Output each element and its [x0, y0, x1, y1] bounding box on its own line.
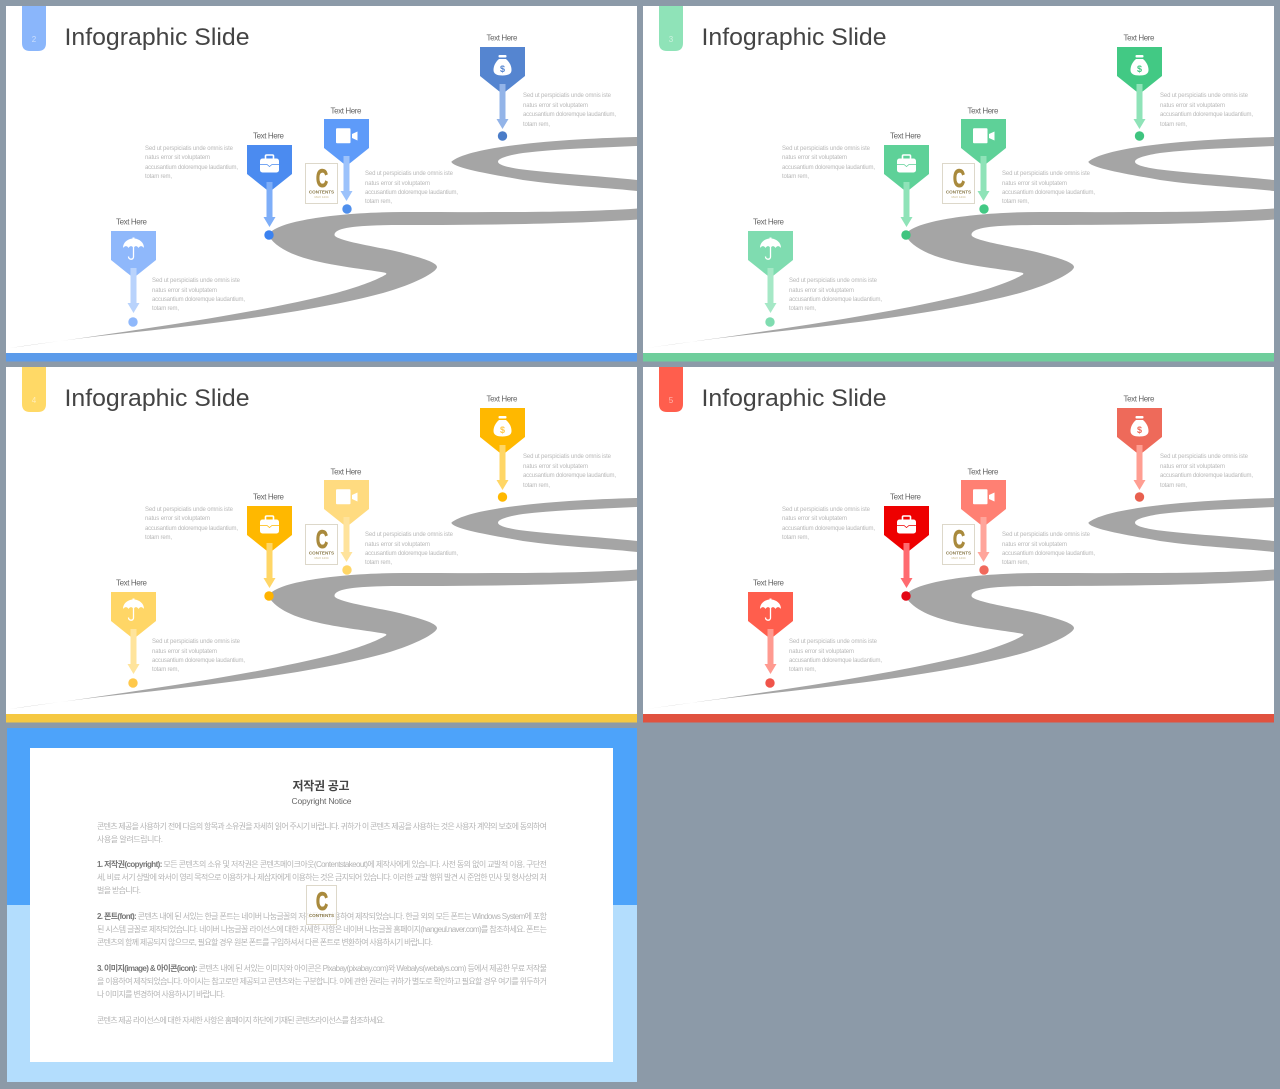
text block 4: natus error sit voluptatem	[523, 464, 588, 470]
text block 2: Sed ut perspiciatis unde omnis iste	[782, 146, 871, 152]
text block 4: Sed ut perspiciatis unde omnis iste	[1160, 454, 1249, 460]
notice text: 된 시스템 글꼴로 제작되었습니다. 네이버 나눔글꼴 라이선스에 대한 자세한 사항은 네이버 나눔글꼴 홈페이지(hangeul.naver.com)를 참조하세요. 폰트는	[97, 924, 547, 934]
pin: money bag: $	[1137, 425, 1142, 435]
text block 3: natus error sit voluptatem	[365, 181, 430, 187]
text block 2: accusantium doloremque laudantium,	[782, 165, 875, 171]
pin: money bag	[480, 394, 525, 502]
text block 4: Sed ut perspiciatis unde omnis iste	[523, 93, 612, 99]
text block 4	[523, 454, 616, 489]
page tab: 3	[669, 35, 674, 44]
text block 4: Sed ut perspiciatis unde omnis iste	[523, 454, 612, 460]
pin: money bag: $	[500, 64, 505, 74]
page tab	[22, 6, 46, 51]
notice text: 1. 저작권(copyright): 모든 콘텐츠의 소유 및 저작권은 콘텐츠메이크아웃(Contentstakeout)에 제작사에게 있습니다. 사전 동의 없이 교발적 이용, 구단전	[97, 859, 547, 869]
text block 1: totam rem,	[152, 667, 179, 673]
text block 3: accusantium doloremque laudantium,	[1002, 190, 1095, 196]
page tab	[659, 367, 683, 412]
text block 1: totam rem,	[789, 667, 816, 673]
pin: video	[324, 106, 369, 214]
heading: Infographic Slide	[64, 385, 249, 412]
text block 2	[145, 146, 238, 180]
text block 1: accusantium doloremque laudantium,	[152, 658, 245, 664]
text block 2	[782, 507, 875, 541]
text block 3: natus error sit voluptatem	[365, 542, 430, 548]
road	[647, 498, 1274, 709]
text block 1: totam rem,	[789, 306, 816, 312]
pin: video	[324, 468, 369, 575]
pin: video	[961, 468, 1006, 575]
pin: briefcase	[884, 132, 929, 240]
road	[10, 498, 637, 709]
text block 1: Sed ut perspiciatis unde omnis iste	[152, 639, 241, 645]
text block 2	[782, 146, 875, 180]
pin: video: Text Here	[330, 468, 362, 476]
text block 3: natus error sit voluptatem	[1002, 181, 1067, 187]
text block 4	[523, 93, 616, 128]
text block 4: totam rem,	[1160, 122, 1187, 128]
text block 1: Sed ut perspiciatis unde omnis iste	[789, 639, 878, 645]
notice text: 콘텐츠 제공을 사용하기 전에 다음의 항목과 소유권을 자세히 읽어 주시기 바랍니다. 귀하가 이 콘텐츠 제공을 사용하는 것은 사용자 계약의 보호에 동의하여	[97, 821, 547, 831]
text block 4: natus error sit voluptatem	[1160, 464, 1225, 470]
pin: umbrella	[111, 218, 156, 327]
text block 1: natus error sit voluptatem	[789, 649, 854, 655]
pin: briefcase	[884, 492, 929, 601]
notice text: 콘텐츠 제공 라이선스에 대한 자세한 사항은 홈페이지 하단에 기재된 콘텐츠라이선스를 참조하세요.	[97, 1015, 385, 1025]
text block 3: Sed ut perspiciatis unde omnis iste	[365, 171, 454, 177]
text block 3: accusantium doloremque laudantium,	[365, 190, 458, 196]
pin: money bag	[480, 34, 525, 141]
page tab: 5	[669, 396, 674, 405]
footer bar	[6, 353, 637, 362]
page tab: 4	[32, 396, 37, 405]
logo	[306, 886, 336, 924]
page tab	[22, 367, 46, 412]
pin: briefcase: Text Here	[890, 132, 922, 140]
pin: briefcase: Text Here	[253, 492, 285, 502]
text block 3: totam rem,	[1002, 560, 1029, 566]
pin: briefcase: Text Here	[890, 492, 922, 502]
notice text: 을 이용하여 제작되었습니다. 아이시는 참고로만 제공되고 콘텐츠와는 구분합니다. 이에 관한 권리는 귀하가 별도로 확인하고 필요할 경우 여기를 위두하거	[97, 976, 547, 986]
text block 2: totam rem,	[782, 535, 809, 541]
text block 2: natus error sit voluptatem	[145, 516, 210, 522]
pin: umbrella	[748, 218, 793, 327]
text block 3	[1002, 532, 1095, 566]
text block 1: Sed ut perspiciatis unde omnis iste	[789, 278, 878, 284]
footer bar	[643, 353, 1274, 362]
pin: umbrella: Text Here	[753, 578, 785, 588]
pin: umbrella	[748, 578, 793, 688]
text block 4: natus error sit voluptatem	[1160, 103, 1225, 109]
text block 4: natus error sit voluptatem	[523, 103, 588, 109]
notice text: 2. 폰트(font): 콘텐츠 내에 된 서있는 한글 폰트는 네이버 나눔글꼴의 저작물을 이용하여 제작되었습니다. 한글 외의 모든 폰트는 Windows System에 포함	[97, 911, 548, 921]
text block 1	[789, 639, 882, 673]
text block 2: natus error sit voluptatem	[782, 155, 847, 161]
text block 1: natus error sit voluptatem	[789, 288, 854, 294]
panel: yellow slide	[6, 367, 637, 722]
pin: umbrella	[111, 578, 156, 688]
text block 2: natus error sit voluptatem	[782, 516, 847, 522]
pin: video: Text Here	[330, 106, 362, 116]
text block 4	[1160, 454, 1253, 489]
text block 2: natus error sit voluptatem	[145, 155, 210, 161]
logo	[306, 164, 338, 204]
notice text: 콘텐츠의 함께 제공되지 않으므로, 필요할 경우 원본 폰트를 구입하셔서 다른 폰트로 변환하여 사용하시기 바랍니다.	[97, 937, 433, 947]
pin: money bag: Text Here	[486, 34, 518, 42]
text block 1: natus error sit voluptatem	[152, 288, 217, 294]
text block 2: totam rem,	[782, 174, 809, 180]
text block 3: totam rem,	[365, 199, 392, 205]
text block 1	[152, 278, 245, 312]
text block 3: totam rem,	[365, 560, 392, 566]
text block 3: Sed ut perspiciatis unde omnis iste	[1002, 171, 1091, 177]
pin: video	[961, 106, 1006, 214]
text block 2: Sed ut perspiciatis unde omnis iste	[145, 507, 234, 513]
text block 3	[365, 532, 458, 566]
pin: briefcase	[247, 492, 292, 601]
pin: money bag	[1117, 34, 1162, 141]
notice text: 벌을 받습니다.	[97, 885, 141, 895]
pin: umbrella: Text Here	[116, 218, 148, 226]
footer bar	[643, 714, 1274, 722]
pin: video: Text Here	[968, 468, 999, 476]
text block 4: totam rem,	[523, 122, 550, 128]
text block 3: Sed ut perspiciatis unde omnis iste	[365, 532, 454, 538]
text block 2: Sed ut perspiciatis unde omnis iste	[145, 146, 234, 152]
text block 1: accusantium doloremque laudantium,	[152, 297, 245, 303]
panel: blue slide	[6, 6, 637, 362]
text block 4: accusantium doloremque laudantium,	[523, 112, 616, 118]
heading: Infographic Slide	[702, 385, 886, 412]
text block 1: natus error sit voluptatem	[152, 649, 217, 655]
notice text: 나 이미지를 변경하여 사용하시기 바랍니다.	[97, 989, 225, 999]
notice text: 3. 이미지(image) & 아이콘(icon): 콘텐츠 내에 된 서있는 이미지와 아이콘은 Pixabay(pixabay.com)와 Webalys(webalys.com) 등에서 제공한 무료 저작물	[97, 963, 547, 973]
text block 2	[145, 507, 238, 541]
pin: video: Text Here	[968, 106, 999, 116]
text block 4: accusantium doloremque laudantium,	[523, 473, 616, 479]
pin: money bag: $	[500, 425, 505, 435]
text block 2: accusantium doloremque laudantium,	[782, 526, 875, 532]
pin: umbrella: Text Here	[753, 218, 785, 226]
text block 1	[789, 278, 882, 312]
notice text: 세, 비료 서기 상발에 와서이 영리 목적으로 이용하거나 제삼자에게 이용하는 것은 금지되어 있습니다. 이러한 교발 행위 발견 시 준엄한 민사 및 형사상의 처	[97, 872, 547, 882]
pin: umbrella: Text Here	[116, 578, 148, 588]
notice text: 사용을 알려드립니다.	[97, 834, 163, 844]
text block 2: totam rem,	[145, 535, 172, 541]
text block 1: totam rem,	[152, 306, 179, 312]
page tab	[659, 6, 683, 51]
copyright heading: 저작권 공고	[292, 778, 350, 793]
text block 3: accusantium doloremque laudantium,	[1002, 551, 1095, 557]
text block 3: accusantium doloremque laudantium,	[365, 551, 458, 557]
text block 2: totam rem,	[145, 174, 172, 180]
pin: money bag: Text Here	[486, 394, 518, 404]
logo	[306, 524, 338, 564]
text block 2: accusantium doloremque laudantium,	[145, 526, 238, 532]
logo	[942, 164, 974, 204]
text block 3	[365, 171, 458, 205]
text block 2: accusantium doloremque laudantium,	[145, 165, 238, 171]
road	[647, 137, 1274, 348]
panel: green slide	[643, 6, 1274, 362]
logo	[942, 524, 974, 564]
pin: briefcase	[247, 132, 292, 240]
footer bar	[6, 714, 637, 722]
text block 4: totam rem,	[1160, 483, 1187, 489]
logo: CONTENTS	[309, 913, 334, 918]
heading: Infographic Slide	[702, 24, 886, 51]
road	[10, 137, 637, 348]
text block 3: Sed ut perspiciatis unde omnis iste	[1002, 532, 1091, 538]
text block 4: accusantium doloremque laudantium,	[1160, 473, 1253, 479]
text block 4: totam rem,	[523, 483, 550, 489]
text block 1: accusantium doloremque laudantium,	[789, 297, 882, 303]
pin: money bag	[1117, 394, 1162, 502]
panel: copyright notice	[7, 728, 637, 1082]
text block 4: accusantium doloremque laudantium,	[1160, 112, 1253, 118]
copyright subheading: Copyright Notice	[292, 796, 352, 806]
text block 1: accusantium doloremque laudantium,	[789, 658, 882, 664]
text block 1	[152, 639, 245, 673]
heading: Infographic Slide	[64, 24, 249, 51]
pin: money bag: Text Here	[1124, 34, 1155, 42]
text block 4	[1160, 93, 1253, 128]
panel: red slide	[643, 367, 1274, 722]
notice text	[97, 821, 548, 1025]
text block 3: totam rem,	[1002, 199, 1029, 205]
page tab: 2	[32, 35, 37, 44]
logo: C	[316, 888, 328, 916]
pin: briefcase: Text Here	[253, 132, 285, 140]
text block 1: Sed ut perspiciatis unde omnis iste	[152, 278, 241, 284]
text block 4: Sed ut perspiciatis unde omnis iste	[1160, 93, 1249, 99]
text block 3	[1002, 171, 1095, 205]
text block 3: natus error sit voluptatem	[1002, 542, 1067, 548]
pin: money bag: $	[1137, 64, 1142, 74]
pin: money bag: Text Here	[1124, 394, 1155, 404]
text block 2: Sed ut perspiciatis unde omnis iste	[782, 507, 871, 513]
